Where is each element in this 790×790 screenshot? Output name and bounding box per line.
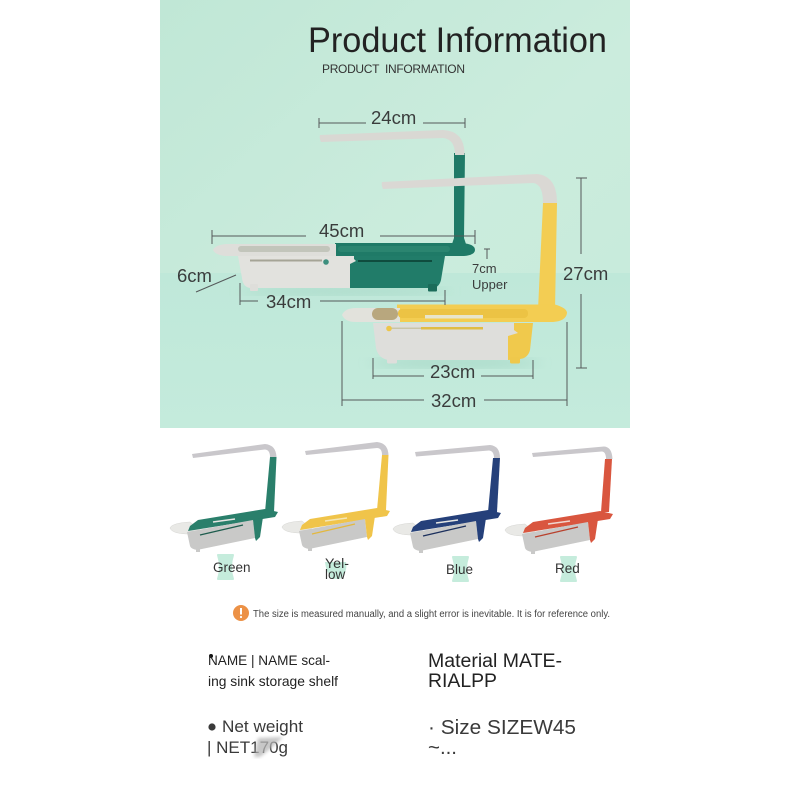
dimension: 23cm (373, 358, 533, 382)
spec: material: RIALPP (428, 671, 497, 692)
color label: Yellow: low (325, 567, 346, 582)
spec: name (208, 652, 338, 689)
dimension: 7cm upper: Upper (472, 277, 508, 292)
product: yellow sink shelf (342, 174, 567, 364)
dimension: 7cm upper (472, 249, 508, 292)
dimension: 34cm: 34cm (266, 291, 311, 312)
color label: Green (213, 555, 251, 579)
spec: net weight (207, 717, 303, 757)
dimension: 45cm (212, 220, 475, 244)
color label: Blue: Blue (446, 562, 473, 577)
product variant: blue (393, 445, 501, 553)
spec: material: Material MATE- (428, 651, 562, 672)
subtitle: PRODUCT INFORMATION (322, 62, 465, 76)
title: Product Information (308, 21, 607, 60)
color label: Yellow: Yel- (325, 556, 349, 571)
product: green sink shelf (213, 130, 475, 292)
dimension: 6cm: 6cm (177, 265, 212, 286)
dimension: 32cm: 32cm (431, 390, 476, 411)
spec: name: NAME | NAME scal- (208, 652, 330, 668)
dimension: 27cm (563, 178, 608, 368)
spec: size: · Size SIZEW45 (428, 717, 576, 739)
color label: Green: Green (213, 560, 251, 575)
dimension: 34cm (240, 283, 445, 312)
spec: size (428, 717, 576, 759)
dimension: 24cm: 24cm (371, 107, 416, 128)
product variant: yellow (282, 442, 390, 551)
disclaimer note: The size is measured manually, and a slight error is inevitable. It is for reference only. (253, 609, 610, 620)
dimension: 7cm upper: 7cm (472, 261, 497, 276)
spec: net weight: | NET170g (207, 738, 288, 757)
panel: hero photo background (160, 0, 630, 428)
spec: size: ~... (428, 737, 457, 759)
color label: Yellow (325, 556, 349, 582)
dimension: 45cm: 45cm (319, 220, 364, 241)
product variant: red (505, 446, 613, 554)
dimension: 6cm (177, 265, 236, 292)
color label: Red (555, 557, 580, 581)
color label: Red: Red (555, 561, 580, 576)
icon: warning (233, 605, 249, 621)
dimension: 27cm: 27cm (563, 263, 608, 284)
dimension: 24cm (319, 107, 465, 128)
spec: name: ing sink storage shelf (208, 673, 338, 689)
product variant: green (170, 444, 278, 552)
color label: Blue (446, 557, 473, 581)
spec: net weight: Net weight (222, 717, 303, 736)
dimension: 32cm (342, 321, 567, 411)
dimension: 23cm: 23cm (430, 361, 475, 382)
spec: material (428, 651, 562, 692)
